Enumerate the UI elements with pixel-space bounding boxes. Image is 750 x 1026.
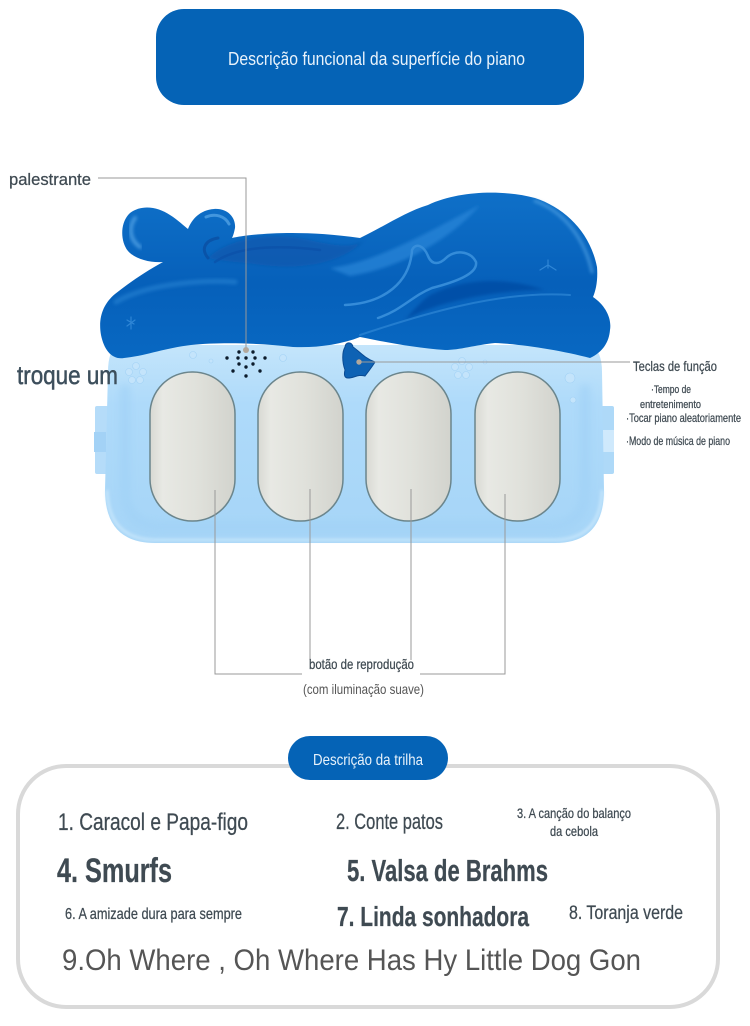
panel: track list xyxy=(18,736,718,1007)
track 7: 7. Linda sonhadora xyxy=(337,901,529,932)
callout: speaker xyxy=(9,170,249,353)
track 9: 9.Oh Where , Oh Where Has Hy Little Dog Gon xyxy=(62,944,641,977)
embossed flowers xyxy=(126,352,576,403)
soft light note: (com iluminação suave) xyxy=(303,681,424,697)
track 5: 5. Valsa de Brahms xyxy=(347,853,548,888)
function keys heading: Teclas de função xyxy=(633,358,717,374)
track list heading pill xyxy=(288,736,448,780)
header title: Descrição funcional da superfície do piano xyxy=(228,49,525,69)
switch label: troque um xyxy=(17,360,118,390)
play button label: botão de reprodução xyxy=(309,656,414,672)
function keys list xyxy=(626,384,741,448)
track list heading pill: Descrição da trilha xyxy=(313,752,423,769)
key 1 xyxy=(150,372,235,521)
track 3: 3. A canção do balanço xyxy=(517,805,631,821)
track 8: 8. Toranja verde xyxy=(569,903,683,924)
key 3 xyxy=(366,372,451,521)
track 3 xyxy=(517,805,631,839)
piano body xyxy=(105,345,604,543)
track 4: 4. Smurfs xyxy=(57,852,172,890)
header pill xyxy=(156,9,584,105)
speaker holes xyxy=(225,350,267,378)
callout: play buttons xyxy=(215,489,505,697)
speaker label: palestrante xyxy=(9,170,91,189)
track 1: 1. Caracol e Papa-figo xyxy=(58,809,248,836)
key 4 xyxy=(475,372,560,521)
whale shading xyxy=(208,205,545,320)
track 3: da cebola xyxy=(550,823,598,839)
callout: function keys xyxy=(356,358,741,448)
function keys list: entretenimento xyxy=(640,399,701,411)
key 2 xyxy=(258,372,343,521)
whale xyxy=(100,193,610,358)
piano toy illustration xyxy=(94,193,614,543)
whale highlights xyxy=(116,201,592,335)
icon: bell button xyxy=(343,343,375,378)
function keys list: ·Tempo de xyxy=(651,384,691,396)
track 2: 2. Conte patos xyxy=(336,809,443,834)
side tabs xyxy=(94,406,614,474)
track 6: 6. A amizade dura para sempre xyxy=(65,906,242,923)
